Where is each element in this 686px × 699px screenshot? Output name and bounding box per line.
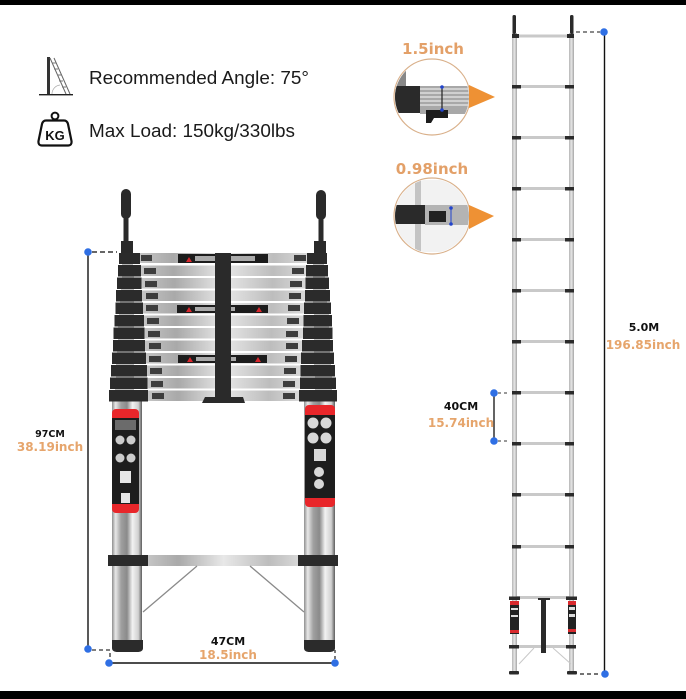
dimension: rung spacing 40cm: 15.74inch [428,416,494,430]
detail circle: tube width [394,178,470,254]
dimension: length 5.0m [576,28,680,678]
dimension: width 47cm: 47CM [211,635,245,648]
rung collars [509,34,577,648]
label: 1.5inch: 1.5inch [402,40,464,58]
top black bar [0,0,686,5]
rungs [517,34,569,648]
safety labels [510,601,576,634]
dimension: rung spacing 40cm [428,389,510,445]
arrow: 0.98inch callout [469,205,494,229]
dimension: width 47cm [105,635,339,667]
icon: ladder angle [39,57,73,95]
right safety label [305,405,335,507]
dimension: height 97cm: 38.19inch [17,440,83,454]
icon: KG weight [38,113,72,146]
warning labels [177,254,268,363]
detail circle: rung width [394,59,470,135]
rails [512,33,574,671]
dimension: height 97cm: 97CM [35,429,65,440]
folded ladder [108,189,338,652]
rung slots [141,255,306,399]
bottom rung [108,555,338,612]
icon: KG weight: KG [45,128,65,143]
extended ladder [509,15,577,674]
bottom black bar [0,691,686,699]
dimension: length 5.0m: 5.0M [629,321,659,334]
dimension: width 47cm: 18.5inch [199,648,257,662]
recommended angle text: Recommended Angle: 75° [89,68,309,88]
braces and feet [509,648,577,674]
rung panels [140,253,307,401]
lower tubes [112,400,335,652]
collar highlights [115,264,332,390]
arrow: 1.5inch callout [469,85,495,108]
hooks [121,189,326,253]
center strap [202,253,245,403]
dimension: height 97cm [17,248,117,660]
strap [538,598,550,653]
dimension: rung spacing 40cm: 40CM [444,400,478,413]
label: 0.98inch: 0.98inch [396,160,468,178]
max load text: Max Load: 150kg/330lbs [89,121,295,141]
left safety label [112,409,139,513]
hooks [512,15,574,34]
collars [109,253,337,402]
dimension: length 5.0m: 196.85inch [606,338,680,352]
